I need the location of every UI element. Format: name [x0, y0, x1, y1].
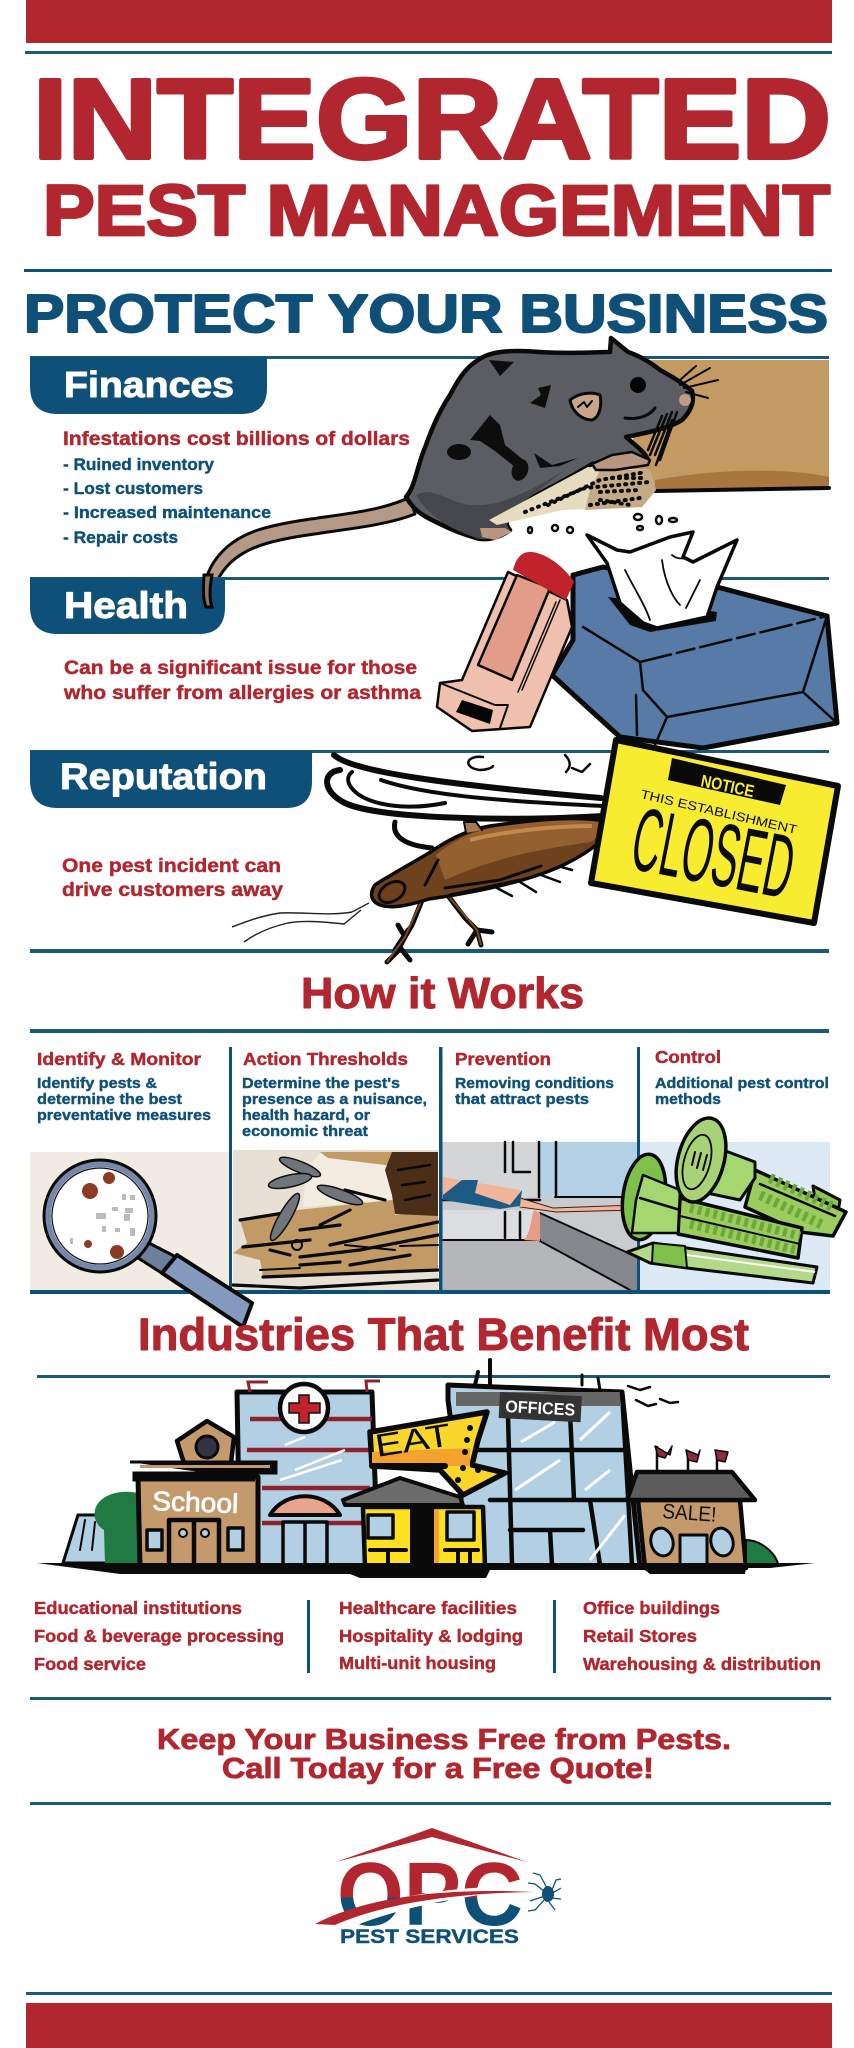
column text: action thresholds: presence as a nuisance, [242, 1091, 427, 1108]
icon: spider [528, 1873, 561, 1911]
tab: reputation: Reputation [60, 756, 267, 797]
title: INTEGRATED [33, 56, 831, 182]
illustration: closed notice sign: THIS ESTABLISHMENT [639, 787, 799, 837]
office tower: OFFICES [505, 1397, 576, 1420]
list: industries column 3 [583, 1598, 821, 1674]
logo: OPC pest services: OPC [337, 1845, 523, 1945]
icon: magnifying glass with bugs [44, 1160, 252, 1327]
column text: action thresholds: health hazard, or [242, 1107, 370, 1124]
heading: how it works: How it Works [301, 969, 584, 1018]
column text: identify and monitor [37, 1049, 211, 1124]
eat sign: EAT [372, 1416, 453, 1464]
school: School [152, 1486, 239, 1519]
list: industries column 1: Educational institutions [34, 1598, 242, 1618]
section dividers [30, 1047, 830, 1294]
column text: control: methods [655, 1091, 721, 1108]
column text: identify and monitor: preventative measures [37, 1107, 211, 1124]
title [33, 56, 831, 251]
text: infestation costs: - Repair costs [63, 529, 178, 547]
list: industries column 2: Hospitality & lodging [339, 1626, 523, 1646]
tab: health: Health [64, 585, 188, 626]
retail store [627, 1446, 778, 1568]
text: infestation costs: - Ruined inventory [63, 456, 215, 474]
list: industries column 2 [339, 1598, 523, 1673]
text: reputation [62, 855, 283, 901]
panel: identify and monitor [30, 1049, 229, 1290]
list: industries column 3: Warehousing & distribution [583, 1654, 821, 1674]
top red banner [26, 0, 832, 43]
icon: green bait stations [617, 1113, 846, 1283]
school [130, 1421, 276, 1567]
column text: prevention: that attract pests [455, 1091, 589, 1108]
list: industries column 3: Retail Stores [583, 1626, 697, 1646]
tab: health [30, 578, 225, 634]
column text: action thresholds: economic threat [242, 1123, 368, 1140]
column text: control: Additional pest control [655, 1075, 829, 1092]
text: health issue [63, 657, 421, 704]
list: industries column 1 [34, 1598, 284, 1674]
tab: finances: Finances [64, 364, 234, 405]
panel: action thresholds [233, 1049, 438, 1290]
swing set and trees [63, 1492, 362, 1564]
heading: protect your business: PROTECT YOUR BUSINESS [24, 284, 828, 344]
text: infestation costs: Infestations cost billions of dollars [63, 428, 410, 450]
call to action: Keep Your Business Free from Pests. [157, 1724, 731, 1756]
illustration: tissue box [552, 532, 837, 748]
column text: identify and monitor: Identify & Monitor [37, 1049, 201, 1069]
logo: OPC pest services: PEST SERVICES [340, 1927, 519, 1948]
list: industries column 1: Food service [34, 1654, 146, 1674]
panel: prevention [442, 1049, 637, 1292]
ground [37, 1563, 815, 1578]
column text: action thresholds [242, 1049, 427, 1140]
illustration: cockroach [232, 818, 604, 962]
panel: health [30, 575, 829, 704]
tab: finances [30, 357, 267, 414]
column text: control [655, 1047, 829, 1108]
column text: identify and monitor: Identify pests & [37, 1075, 157, 1092]
termites [266, 1154, 364, 1243]
panel: reputation [30, 750, 829, 901]
illustration: business buildings [37, 1360, 815, 1578]
bottom red banner [26, 2003, 832, 2048]
column text: prevention [455, 1049, 614, 1108]
panel: finances [30, 356, 829, 547]
illustration: plates [327, 753, 620, 848]
title: PEST MANAGEMENT [43, 172, 830, 251]
list: industries column 2: Multi-unit housing [339, 1653, 496, 1673]
text: health issue: Can be a significant issue for those [64, 657, 417, 679]
column text: action thresholds: Determine the pest's [242, 1075, 400, 1092]
restaurant [343, 1478, 485, 1567]
column text: control: Control [655, 1047, 721, 1067]
column text: prevention: Prevention [455, 1049, 551, 1069]
birds [628, 1386, 678, 1406]
call to action: Call Today for a Free Quote! [222, 1753, 654, 1785]
column text: action thresholds: Action Thresholds [243, 1049, 408, 1069]
list: industries column 1: Food & beverage processing [34, 1626, 284, 1646]
text: reputation: drive customers away [62, 879, 283, 901]
illustration: closed notice sign [591, 740, 838, 923]
eat sign [370, 1412, 505, 1495]
text: infestation costs [63, 428, 410, 547]
list: industries column 2: Healthcare facilities [339, 1598, 517, 1618]
office tower [448, 1360, 640, 1567]
text: infestation costs: - Lost customers [63, 480, 203, 498]
text: infestation costs: - Increased maintenance [63, 504, 271, 522]
column text: identify and monitor: determine the best [37, 1091, 182, 1108]
retail store: SALE! [662, 1500, 717, 1527]
heading: industries that benefit most: Industries That Benefit Most [138, 1309, 749, 1360]
column text: prevention: Removing conditions [455, 1075, 614, 1092]
illustration: rat eating at burrow [204, 338, 829, 606]
list: industries column 3: Office buildings [583, 1598, 720, 1618]
text: reputation: One pest incident can [62, 855, 281, 877]
logo: OPC pest services [312, 1828, 561, 1948]
hospital [237, 1381, 380, 1567]
illustration: closed notice sign: NOTICE [699, 771, 756, 801]
call to action [157, 1724, 731, 1785]
illustration: inhaler [437, 552, 574, 731]
tab: reputation [30, 751, 312, 808]
text: health issue: who suffer from allergies or asthma [63, 682, 421, 704]
panel: control [640, 1047, 830, 1292]
